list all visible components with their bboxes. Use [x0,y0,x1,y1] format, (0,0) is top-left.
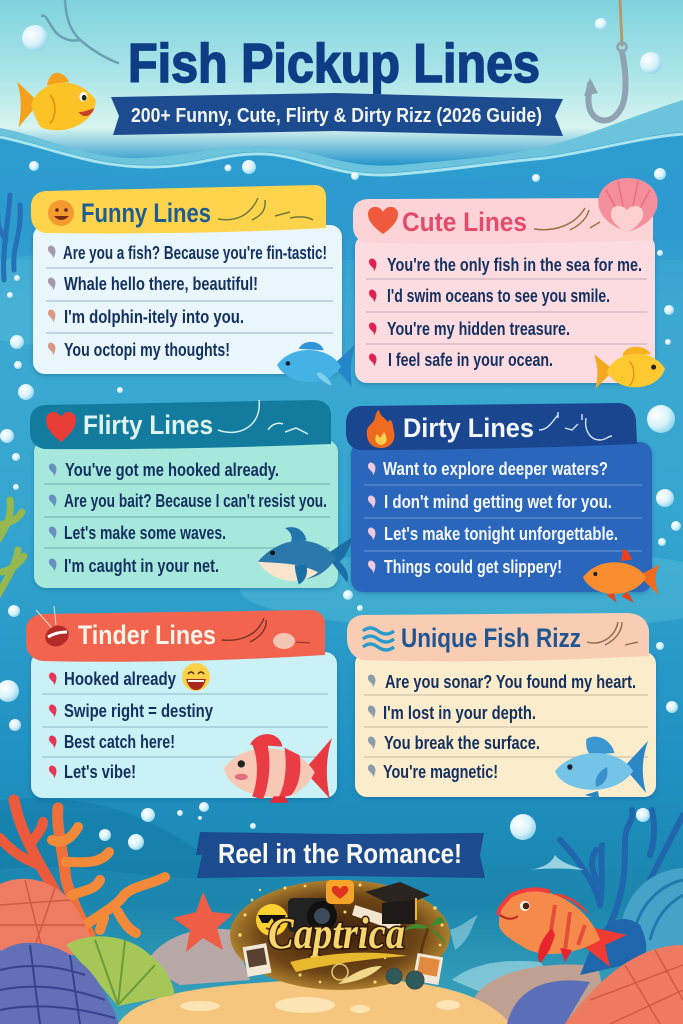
list lines: Let's make some waves. [64,523,226,543]
list lines: Whale hello there, beautiful! [64,274,258,294]
heading: Dirty Lines [403,413,534,443]
background: darker blue wash blobs [0,250,683,880]
decoration: seaweed left green [0,500,24,595]
icon: laughing emoji [182,663,210,691]
icon: feather and shutter [332,964,382,984]
panel: unique fish rizz [347,613,656,799]
icon: flame [367,410,394,448]
list lines: You've got me hooked already. [65,460,279,480]
decorative line doodle [218,198,313,220]
panel: dirty lines [346,403,660,603]
heading: Tinder Lines [78,620,216,650]
rock: grey [145,929,250,985]
icon: blue fish [277,342,355,387]
icon: water waves [363,628,394,650]
icon: pink seashell with heart [598,178,658,233]
decorative hook doodle [539,412,612,440]
list lines: Best catch here! [64,732,175,752]
icon: shark [258,527,355,585]
icon: camera [288,898,337,932]
panel body [34,440,338,588]
icon: yellow fish [594,347,665,389]
list lines: Hooked already [64,669,176,689]
list lines: Let's make tonight unforgettable. [384,524,618,544]
logo background [230,880,450,990]
heading: Funny Lines [81,198,211,228]
list lines: Let's vibe! [64,762,136,782]
seaweed right [560,810,683,925]
decoration: thin fishing wire top left [42,0,118,63]
panel header [353,198,653,244]
bullets [368,674,375,778]
icon: sunglasses [386,968,424,989]
title: Fish Pickup Lines [128,32,540,94]
panel: cute lines [353,178,665,389]
panel: flirty lines [30,400,355,588]
icon: photos [243,943,443,985]
decorative line doodle [534,208,600,230]
shell: green [66,936,174,1006]
bullets [369,258,376,366]
subtitle text: 200+ Funny, Cute, Flirty & Dirty Rizz (2026 Guide) [131,105,542,127]
bullets [49,464,56,572]
icon: heart [368,207,398,234]
heading: Cute Lines [402,207,527,237]
icon: orange fish [583,549,660,603]
list lines [383,459,618,577]
panel header [347,613,649,661]
icon: red fish bottom right [499,889,627,967]
panel body [355,652,656,797]
shell: blue right [580,868,683,975]
background: waves at the water surface [0,100,683,260]
icon: heart speech bubble [326,880,354,904]
panel body [31,652,337,798]
panel body [351,442,652,592]
bullets [48,246,55,356]
decorative line and lure doodle [222,618,310,649]
gold sparkles [238,883,444,984]
list lines: Are you bait? Because I can't resist you. [64,491,327,511]
sand highlights [180,997,460,1013]
heading: Flirty Lines [83,410,213,440]
list lines: Things could get slippery! [384,557,562,577]
icon: red striped fish [224,734,332,803]
logo: Captrica badge [230,880,450,990]
list lines: You break the surface. [384,733,540,753]
fin-shaped highlight shapes in water [450,855,584,1000]
list lines: I'd swim oceans to see you smile. [387,286,610,306]
decoration: seaweed left blue [0,195,20,280]
panel body [355,235,655,383]
logo underline swoosh [290,953,408,972]
shell: purple left [0,943,118,1024]
subtitle banner [111,93,563,136]
list lines: I don't mind getting wet for you. [384,492,612,512]
bullets [49,672,56,778]
panel header [30,400,331,449]
list lines: I'm dolphin-itely into you. [64,307,244,327]
decorative line doodle [587,622,638,645]
list lines: I feel safe in your ocean. [388,350,553,370]
list lines [64,460,327,576]
list lines [63,243,327,360]
icon: sunglasses emoji [256,904,288,936]
icon: smiley [48,200,74,226]
icon: graduation cap [365,882,430,924]
bullets [368,462,375,574]
list lines: You octopi my thoughts! [64,340,230,360]
banner text: Reel in the Romance! [218,838,462,869]
rock: right [474,964,610,1024]
list lines: You're magnetic! [383,762,498,782]
heading: Unique Fish Rizz [401,623,581,653]
panel: funny lines [31,185,355,387]
panel: tinder lines [26,606,337,803]
icon: blue fish [555,737,648,799]
panel header [31,185,326,233]
list lines: Want to explore deeper waters? [383,459,608,479]
icon: starfish [173,892,233,952]
list lines: I'm caught in your net. [64,556,219,576]
list lines [64,669,213,782]
icon: red fishing lure [36,606,72,650]
list lines: Are you a fish? Because you're fin-tastic! [63,243,327,263]
list lines [383,672,636,782]
list lines: I'm lost in your depth. [383,703,536,723]
sand [118,979,510,1024]
list lines: Swipe right = destiny [64,701,213,721]
icon: palm tree [402,917,446,965]
panel header [26,610,325,662]
logo wordmark: Captrica [268,909,405,958]
shell: purple right [507,980,590,1024]
banner: reel in the romance [196,832,485,878]
decoration: coral left [0,800,165,935]
icon: yellow fish top left [17,73,96,130]
panel header [346,403,637,450]
icon: diploma [352,905,402,932]
icon: fishing hook top right [584,0,626,120]
list lines: You're my hidden treasure. [387,319,570,339]
icon: heart [46,412,76,442]
shell: pink left [0,879,95,965]
shell: red right [565,945,683,1024]
panel body [33,225,342,374]
decorative line doodle [218,400,308,434]
list lines [387,255,642,370]
